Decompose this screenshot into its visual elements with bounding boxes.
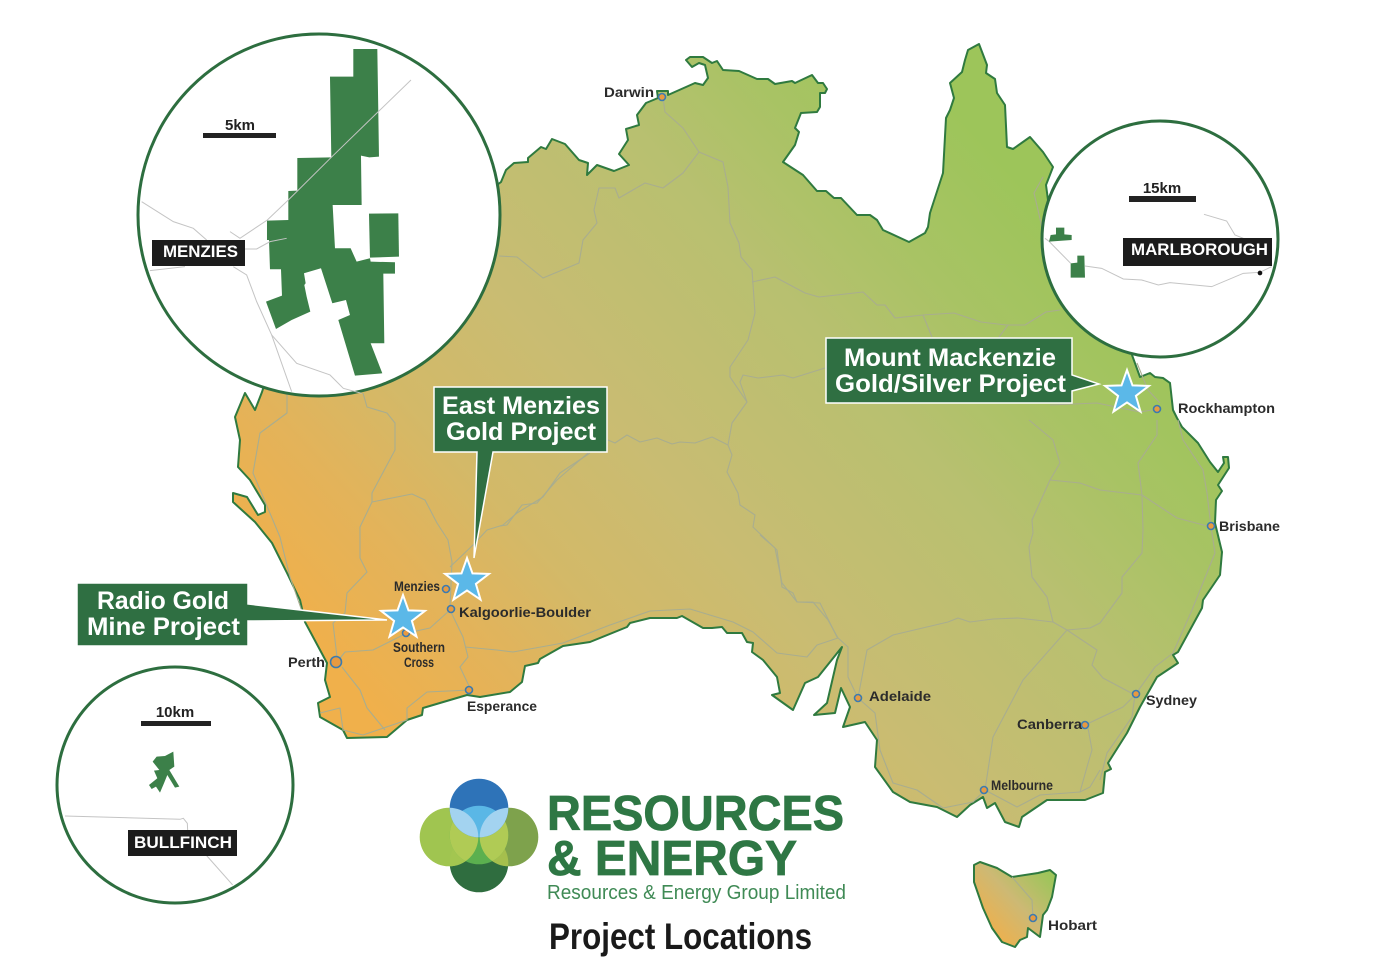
road network <box>253 98 1215 808</box>
star: East Menzies <box>445 558 489 600</box>
callout: East Menzies Gold Project: Gold Project <box>446 418 597 446</box>
logo wordmark: RESOURCES & ENERGY <box>547 787 844 886</box>
callout: East Menzies Gold Project: East Menzies <box>442 392 600 420</box>
Menzies tenement block <box>142 49 411 393</box>
callout: Radio Gold Mine Project: Radio Gold <box>97 587 229 615</box>
Marlborough scale bar: 15km <box>1143 180 1181 197</box>
logo tagline: Resources & Energy Group Limited <box>547 882 846 904</box>
city marker: Perth: Perth <box>288 654 325 670</box>
logo wordmark: RESOURCES & ENERGY: RESOURCES <box>547 787 844 841</box>
callout: East Menzies Gold Project <box>434 387 607 558</box>
Marlborough tenements and roads <box>1045 214 1272 287</box>
Menzies name tag <box>152 240 245 266</box>
inset: Bullfinch <box>57 667 293 903</box>
Marlborough scale bar <box>1129 180 1196 202</box>
city marker: Southern Cross: Cross <box>404 654 434 670</box>
city marker: Southern Cross <box>393 630 445 670</box>
city marker: Rockhampton: Rockhampton <box>1178 400 1275 416</box>
city marker: Perth <box>288 654 342 670</box>
city marker: Hobart: Hobart <box>1048 917 1097 933</box>
logo wordmark: RESOURCES & ENERGY: & ENERGY <box>547 832 797 886</box>
Marlborough name tag: MARLBOROUGH <box>1131 240 1268 259</box>
Marlborough name tag <box>1123 238 1272 266</box>
logo icon: overlapping circles <box>420 779 538 892</box>
Menzies name tag: MENZIES <box>163 242 238 261</box>
callout: Radio Gold Mine Project: Mine Project <box>87 613 241 641</box>
city marker: Kalgoorlie-Boulder: Kalgoorlie-Boulder <box>459 604 592 620</box>
Menzies scale bar: 5km <box>225 117 255 134</box>
callout: Mount Mackenzie Gold/Silver Project <box>826 338 1099 403</box>
city marker: Canberra: Canberra <box>1017 716 1082 732</box>
Bullfinch name tag: BULLFINCH <box>134 833 232 852</box>
city marker: Esperance <box>466 686 537 714</box>
city marker: Adelaide: Adelaide <box>869 688 931 704</box>
Bullfinch scale bar: 10km <box>156 704 194 721</box>
title: Project Locations <box>549 916 812 957</box>
Bullfinch name tag <box>128 830 237 856</box>
map of mainland Australia <box>233 44 1229 827</box>
inset: Marlborough <box>1042 121 1278 357</box>
star: Mount Mackenzie <box>1105 370 1149 412</box>
city marker: Esperance: Esperance <box>467 698 537 714</box>
Menzies scale bar <box>203 117 276 138</box>
city marker: Darwin: Darwin <box>604 84 654 100</box>
Bullfinch scale bar <box>141 704 211 726</box>
callout: Mount Mackenzie Gold/Silver Project: Gold/Silver Project <box>835 370 1067 398</box>
map of Tasmania <box>974 862 1056 947</box>
city marker: Brisbane: Brisbane <box>1219 518 1280 534</box>
city marker: Menzies: Menzies <box>394 578 440 594</box>
city marker: Hobart <box>1030 914 1097 933</box>
city marker: Sydney: Sydney <box>1146 692 1197 708</box>
inset: Menzies <box>138 34 500 396</box>
city marker: Southern Cross: Southern <box>393 639 445 655</box>
star: Radio Gold <box>381 595 425 637</box>
Bullfinch tenement and roads <box>65 752 233 885</box>
callout: Radio Gold Mine Project <box>77 583 387 646</box>
city marker: Melbourne: Melbourne <box>991 777 1053 793</box>
callout: Mount Mackenzie Gold/Silver Project: Mount Mackenzie <box>844 344 1056 372</box>
